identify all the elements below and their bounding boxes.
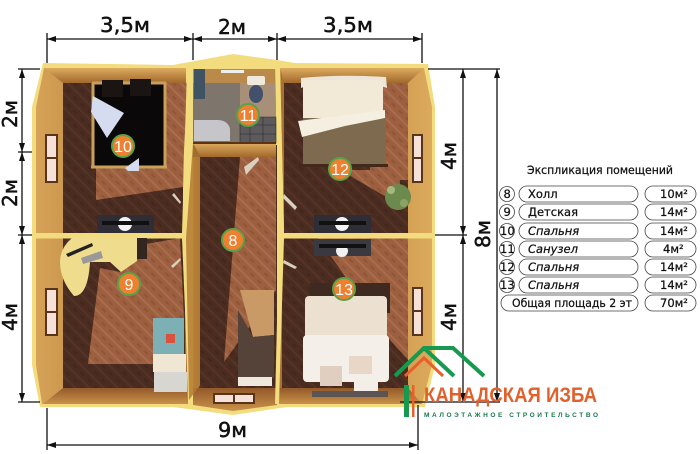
number badges: 12 [331,162,349,179]
dimension labels [0,13,495,442]
stairs [238,290,274,386]
plant [385,184,411,210]
desk room 9 [60,238,147,296]
logo bars [404,385,409,417]
dimension arrows [19,36,500,448]
row 9 [500,204,696,220]
row 9: 9 [504,205,511,219]
house outline [32,54,435,415]
total row: Общая площадь 2 эт [512,296,632,310]
row 11: Санузел [528,242,579,256]
child bed room 9 [153,318,187,392]
bed room 13 [303,283,390,397]
tv units [97,215,371,257]
row 10: Спальня [528,224,579,238]
total row: 70м² [660,296,688,310]
number badges: 11 [240,108,256,125]
row 10 [500,223,696,239]
row 12: 12 [500,260,515,274]
number badges: 8 [229,233,238,250]
doors [171,157,297,269]
bathroom [193,69,276,143]
row 12: Спальня [528,260,579,274]
row 11: 11 [500,242,515,256]
dimension labels: 9м [218,418,247,442]
row 11 [500,241,696,257]
row 12: 14м² [660,260,688,274]
number badges [112,104,355,300]
room 13 walls and floor [278,238,432,404]
table title: Экспликация помещений [527,163,673,177]
dimension labels: 3,5м [100,13,150,37]
row 10: 10 [500,224,515,238]
bed room 12 [298,76,388,167]
row 11: 4м² [663,242,684,256]
room table [500,186,696,311]
floor plan [32,54,435,415]
row 12 [500,259,696,275]
room 9 walls and floor [36,238,188,404]
number badges: 9 [125,277,134,294]
row 13: 14м² [660,278,688,292]
dimension labels: 8м [471,220,495,248]
row 9: Детская [528,205,578,219]
interior walls [182,68,193,405]
logo roof [395,348,484,376]
row 8: 10м² [660,187,688,201]
number badges: 13 [335,282,353,299]
row 8: Холл [528,187,558,201]
total row [501,295,696,311]
row 8: 8 [504,187,511,201]
dimension lines [18,33,500,450]
hall floor [193,143,277,411]
windows [46,135,422,403]
dimension labels: 2м [218,15,246,39]
row 9: 14м² [660,205,688,219]
row 8 [500,186,696,202]
row 10: 14м² [660,224,688,238]
number badges: 10 [114,139,132,156]
row 13: Спальня [528,278,579,292]
room 12 walls and floor [280,68,432,233]
dimension labels: 3,5м [323,13,373,37]
row 13: 13 [500,278,515,292]
logo tagline: МАЛОЭТАЖНОЕ СТРОИТЕЛЬСТВО [424,412,598,419]
bed room 10 [91,79,167,171]
row 13 [500,277,696,293]
logo name: КАНАДСКАЯ ИЗБА [424,384,597,407]
logo [395,348,598,419]
dimension labels: 4м [437,142,461,170]
room 10 walls and floor [36,68,188,233]
dimension labels: 4м [437,303,461,331]
